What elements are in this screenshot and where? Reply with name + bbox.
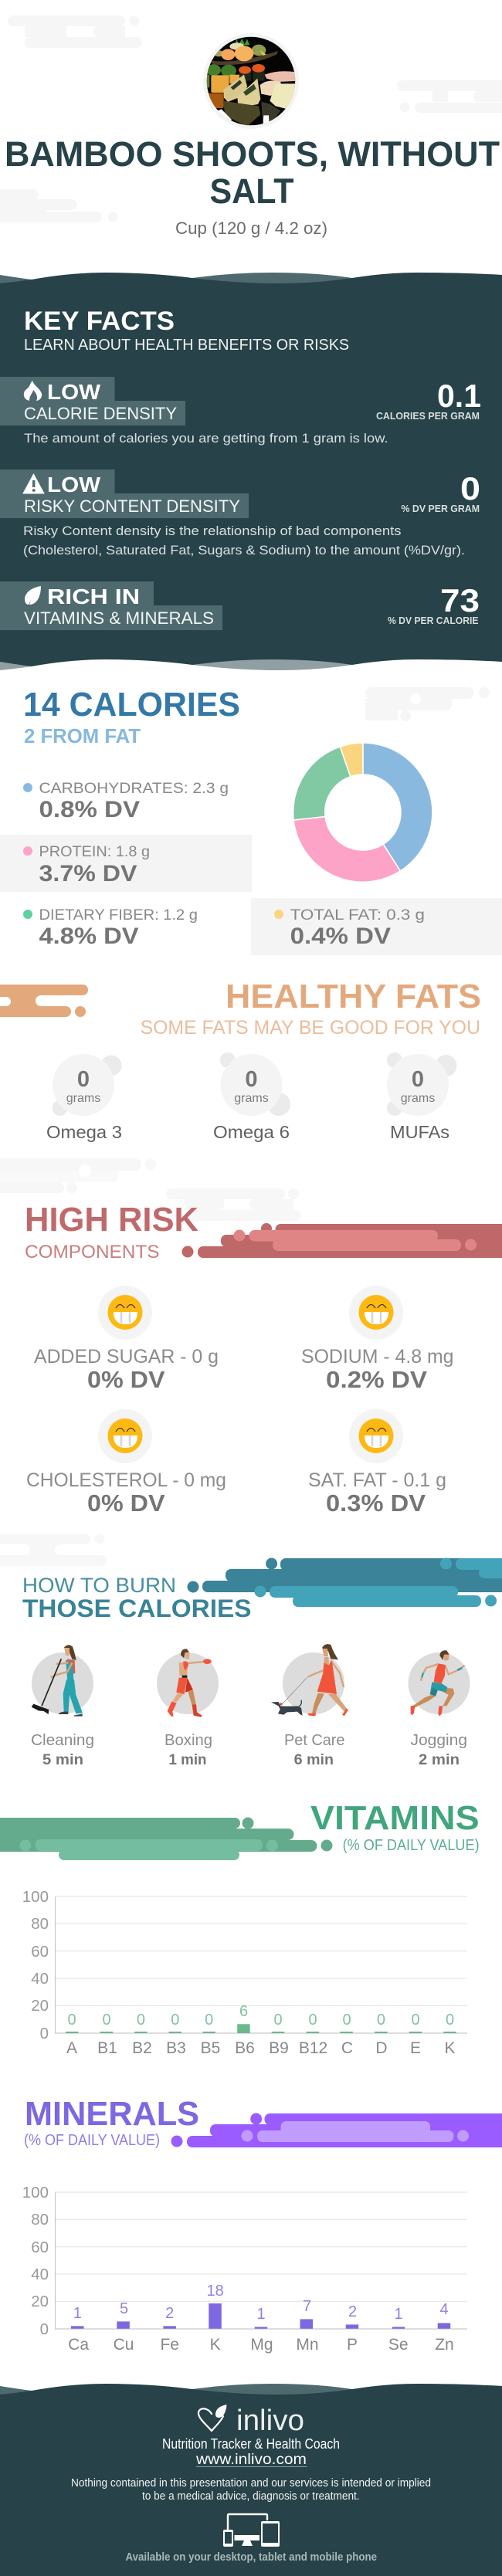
burn calories heading: HOW TO BURN bbox=[22, 1574, 176, 1597]
background clouds: mid page bbox=[0, 1158, 301, 1566]
vitamins bar chart: B6 bbox=[235, 2039, 255, 2057]
fact: calorie density: 0.1 bbox=[437, 378, 481, 414]
legend: carbohydrates: CARBOHYDRATES: 2.3 g bbox=[39, 780, 229, 797]
legend: carbohydrates: 0.8% DV bbox=[39, 797, 140, 822]
minerals bar chart: 20 bbox=[31, 2293, 49, 2310]
legend: dietary fiber bbox=[23, 907, 198, 949]
fat: omega 3: grams bbox=[66, 1092, 100, 1105]
risk: cholesterol: 0% DV bbox=[87, 1490, 165, 1517]
healthy fats heading bbox=[141, 978, 481, 1039]
serving size: Cup (120 g / 4.2 oz) bbox=[175, 219, 327, 238]
risk: saturated fat: SAT. FAT - 0.1 g bbox=[308, 1469, 446, 1491]
activity: jogging bbox=[408, 1650, 470, 1768]
activity: cleaning: 5 min bbox=[42, 1751, 83, 1768]
burn calories banner bbox=[187, 1558, 502, 1607]
vitamins bar chart: 6 bbox=[239, 2003, 248, 2020]
minerals bar chart: P bbox=[347, 2336, 358, 2354]
fat: MUFAs: MUFAs bbox=[390, 1122, 449, 1142]
illustration: woman walking dog bbox=[271, 1644, 348, 1716]
footer tagline and link bbox=[162, 2436, 340, 2468]
illustration: boxer bbox=[168, 1649, 212, 1717]
vitamins bar chart: 0 bbox=[273, 2012, 283, 2029]
fact: rich in vitamins and minerals: % DV PER CALORIE bbox=[388, 615, 479, 626]
fat: omega 3 bbox=[46, 1054, 122, 1142]
fat: MUFAs: grams bbox=[401, 1092, 435, 1105]
minerals bar chart: 18 bbox=[206, 2283, 224, 2300]
title: BAMBOO SHOOTS, WITHOUT bbox=[5, 134, 500, 174]
vitamins bar chart: K bbox=[444, 2039, 456, 2057]
vitamins bar chart: 0 bbox=[377, 2012, 385, 2029]
fat: omega 6: 0 bbox=[245, 1067, 258, 1092]
legend: total fat bbox=[274, 907, 425, 949]
calories heading: 14 CALORIES bbox=[23, 686, 240, 724]
activity: jogging: Jogging bbox=[411, 1732, 467, 1749]
legend: dietary fiber: DIETARY FIBER: 1.2 g bbox=[39, 907, 198, 924]
activity: jogging: 2 min bbox=[419, 1751, 460, 1768]
fat: MUFAs bbox=[387, 1052, 457, 1142]
legend: total fat: TOTAL FAT: 0.3 g bbox=[290, 907, 425, 924]
vitamins bar chart: 20 bbox=[31, 1997, 49, 2015]
fact: rich in vitamins and minerals: VITAMINS & MINERALS bbox=[24, 608, 214, 628]
fact: risky content density bbox=[0, 469, 480, 558]
fact: risky content density: (Cholesterol, Saturated Fat, Sugars & Sodium) to the amount (%DV/gr). bbox=[23, 543, 465, 558]
activity: boxing: 1 min bbox=[168, 1751, 207, 1768]
vitamins bar chart: 80 bbox=[31, 1915, 49, 1933]
disclaimer: to be a medical advice, diagnosis or treatment. bbox=[142, 2490, 360, 2503]
vitamins bar chart: 0 bbox=[137, 2012, 145, 2029]
fact: rich in vitamins and minerals: 73 bbox=[440, 582, 480, 619]
minerals bar chart: 2 bbox=[348, 2303, 357, 2320]
activity: pet care bbox=[271, 1644, 348, 1768]
minerals bar chart: 2 bbox=[165, 2305, 174, 2322]
key facts heading: LEARN ABOUT HEALTH BENEFITS OR RISKS bbox=[24, 336, 349, 354]
activity: boxing bbox=[157, 1649, 219, 1768]
minerals bar chart: 1 bbox=[256, 2306, 266, 2323]
icon: smiling face bbox=[358, 1295, 394, 1330]
illustration: woman sweeping bbox=[32, 1645, 83, 1717]
fact: risky content density: RISKY CONTENT DENSITY bbox=[24, 497, 240, 516]
minerals heading bbox=[24, 2095, 199, 2149]
background clouds: header bbox=[0, 15, 502, 222]
vitamins bar chart: B2 bbox=[132, 2039, 152, 2057]
donut chart bbox=[293, 743, 432, 882]
vitamins heading: VITAMINS bbox=[310, 1799, 480, 1837]
fat: MUFAs: 0 bbox=[412, 1067, 424, 1092]
vitamins bar chart: 0 bbox=[446, 2012, 454, 2029]
minerals bar chart: 100 bbox=[22, 2184, 49, 2201]
risk: saturated fat: 0.3% DV bbox=[326, 1490, 426, 1517]
fact: calorie density bbox=[0, 377, 481, 446]
minerals bar chart: Zn bbox=[435, 2336, 454, 2354]
vitamins bar chart: B5 bbox=[201, 2039, 220, 2057]
vitamins bar chart: 100 bbox=[22, 1888, 49, 1906]
legend: protein bbox=[23, 843, 150, 886]
risk: cholesterol bbox=[26, 1409, 226, 1517]
icon: desktop, tablet and phone bbox=[223, 2514, 280, 2547]
disclaimer bbox=[71, 2476, 431, 2503]
fact: calorie density: CALORIE DENSITY bbox=[24, 404, 177, 423]
activity: cleaning: Cleaning bbox=[31, 1732, 94, 1749]
vitamins bar chart: B1 bbox=[97, 2039, 117, 2057]
vitamins bar chart: 0 bbox=[40, 2025, 49, 2042]
healthy fats heading: HEALTHY FATS bbox=[226, 978, 481, 1015]
vitamins bar chart: A bbox=[66, 2039, 77, 2057]
vitamins bar chart: C bbox=[341, 2039, 353, 2057]
fact: calorie density: CALORIES PER GRAM bbox=[376, 411, 480, 422]
fat: omega 3: Omega 3 bbox=[46, 1122, 122, 1142]
fat: omega 3: 0 bbox=[77, 1067, 90, 1092]
legend: protein: 3.7% DV bbox=[39, 861, 137, 886]
vitamins bar chart: B12 bbox=[299, 2039, 327, 2057]
fact: risky content density: 0 bbox=[460, 470, 480, 507]
logo: inlivo bbox=[198, 2405, 304, 2437]
minerals bar chart: K bbox=[210, 2336, 221, 2354]
vitamins heading bbox=[310, 1799, 480, 1854]
fat: omega 6: grams bbox=[234, 1092, 269, 1105]
minerals bar chart: 60 bbox=[31, 2239, 49, 2256]
minerals bar chart bbox=[22, 2184, 467, 2354]
burn calories heading: THOSE CALORIES bbox=[22, 1595, 252, 1622]
minerals heading: (% OF DAILY VALUE) bbox=[24, 2132, 160, 2149]
minerals bar chart: 40 bbox=[31, 2266, 49, 2283]
background cloud: calories bbox=[365, 687, 490, 721]
risk: added sugar bbox=[34, 1286, 219, 1393]
icon: smiling face bbox=[108, 1418, 142, 1453]
vitamins bar chart: D bbox=[375, 2039, 388, 2057]
risk: cholesterol: CHOLESTEROL - 0 mg bbox=[26, 1469, 226, 1491]
burn calories heading bbox=[22, 1574, 252, 1622]
minerals bar chart: 7 bbox=[303, 2298, 311, 2315]
vitamins bar chart: 0 bbox=[342, 2012, 351, 2029]
logo: inlivo: inlivo bbox=[236, 2405, 304, 2437]
minerals bar chart: Mn bbox=[296, 2336, 319, 2354]
minerals bar chart: 4 bbox=[439, 2301, 449, 2318]
minerals bar chart: 0 bbox=[40, 2320, 49, 2338]
legend highlight panels bbox=[0, 835, 502, 955]
icon: smiling face bbox=[108, 1295, 142, 1330]
minerals bar chart: 1 bbox=[73, 2305, 82, 2322]
fact: rich in vitamins and minerals: RICH IN bbox=[47, 585, 140, 608]
minerals bar chart: 5 bbox=[120, 2300, 128, 2317]
legend: carbohydrates bbox=[23, 780, 229, 822]
minerals bar chart: Ca bbox=[68, 2336, 89, 2354]
legend: total fat: 0.4% DV bbox=[290, 924, 391, 949]
panel: footer bbox=[0, 2384, 502, 2576]
calories heading bbox=[23, 686, 240, 747]
legend: dietary fiber: 4.8% DV bbox=[39, 924, 139, 949]
vitamins bar chart: E bbox=[410, 2039, 421, 2057]
vitamins heading: (% OF DAILY VALUE) bbox=[343, 1837, 480, 1854]
vitamins bar chart: B3 bbox=[166, 2039, 186, 2057]
key facts heading bbox=[24, 307, 349, 354]
vitamins bar chart: 0 bbox=[102, 2012, 111, 2029]
illustration: jogger bbox=[411, 1650, 465, 1716]
fact: rich in vitamins and minerals bbox=[0, 581, 480, 630]
activity: boxing: Boxing bbox=[165, 1732, 212, 1749]
disclaimer: Nothing contained in this presentation and our services is intended or implied bbox=[71, 2476, 431, 2490]
vitamins bar chart: 0 bbox=[308, 2012, 317, 2029]
risk: sodium: 0.2% DV bbox=[326, 1366, 427, 1393]
footer tagline and link: www.inlivo.com bbox=[195, 2452, 307, 2468]
minerals heading: MINERALS bbox=[25, 2095, 199, 2133]
title: SALT bbox=[210, 171, 293, 211]
vitamins bar chart bbox=[22, 1888, 467, 2057]
key facts heading: KEY FACTS bbox=[24, 307, 175, 336]
minerals banner bbox=[171, 2113, 502, 2147]
vitamins bar chart: 0 bbox=[171, 2012, 179, 2029]
calories heading: 2 FROM FAT bbox=[24, 726, 141, 747]
risk: sodium: SODIUM - 4.8 mg bbox=[301, 1346, 454, 1368]
fat: omega 6 bbox=[213, 1052, 290, 1142]
risk: sodium bbox=[301, 1286, 454, 1393]
minerals bar chart: 1 bbox=[394, 2306, 403, 2323]
minerals bar chart: Fe bbox=[160, 2336, 179, 2354]
fat: omega 6: Omega 6 bbox=[213, 1122, 290, 1142]
vitamins bar chart: B9 bbox=[269, 2039, 289, 2057]
risk: added sugar: 0% DV bbox=[87, 1366, 165, 1393]
minerals bar chart: Cu bbox=[114, 2336, 134, 2354]
panel: key facts bbox=[0, 273, 502, 696]
minerals bar chart: 80 bbox=[31, 2211, 49, 2229]
activity: cleaning bbox=[31, 1645, 94, 1768]
healthy fats banner bbox=[0, 985, 88, 1017]
healthy fats heading: SOME FATS MAY BE GOOD FOR YOU bbox=[141, 1017, 480, 1039]
high risk banner bbox=[182, 1223, 502, 1258]
vitamins bar chart: 40 bbox=[31, 1970, 49, 1988]
legend: protein: PROTEIN: 1.8 g bbox=[39, 843, 150, 860]
food photo bbox=[203, 33, 299, 129]
fact: risky content density: % DV PER GRAM bbox=[402, 503, 480, 514]
activity: pet care: Pet Care bbox=[284, 1732, 344, 1749]
title bbox=[5, 134, 500, 211]
availability note: Available on your desktop, tablet and mobile phone bbox=[125, 2551, 377, 2564]
fact: calorie density: LOW bbox=[47, 380, 101, 404]
risk: added sugar: ADDED SUGAR - 0 g bbox=[34, 1346, 219, 1368]
vitamins banner bbox=[0, 1818, 332, 1860]
fact: calorie density: The amount of calories you are getting from 1 gram is low. bbox=[24, 431, 388, 446]
high risk heading: COMPONENTS bbox=[25, 1242, 159, 1263]
risk: saturated fat bbox=[308, 1409, 446, 1517]
high risk heading: HIGH RISK bbox=[25, 1201, 198, 1239]
footer tagline and link: Nutrition Tracker & Health Coach bbox=[162, 2436, 340, 2452]
minerals bar chart: Mg bbox=[250, 2336, 273, 2354]
high risk heading bbox=[25, 1201, 198, 1263]
vitamins bar chart: 0 bbox=[411, 2012, 420, 2029]
icon: smiling face bbox=[358, 1418, 394, 1453]
vitamins bar chart: 0 bbox=[205, 2012, 213, 2029]
activity: pet care: 6 min bbox=[294, 1751, 334, 1768]
fact: risky content density: Risky Content density is the relationship of bad components bbox=[23, 524, 402, 538]
minerals bar chart: Se bbox=[388, 2336, 409, 2354]
fact: risky content density: LOW bbox=[47, 473, 101, 497]
vitamins bar chart: 0 bbox=[67, 2012, 76, 2029]
vitamins bar chart: 60 bbox=[31, 1943, 49, 1961]
